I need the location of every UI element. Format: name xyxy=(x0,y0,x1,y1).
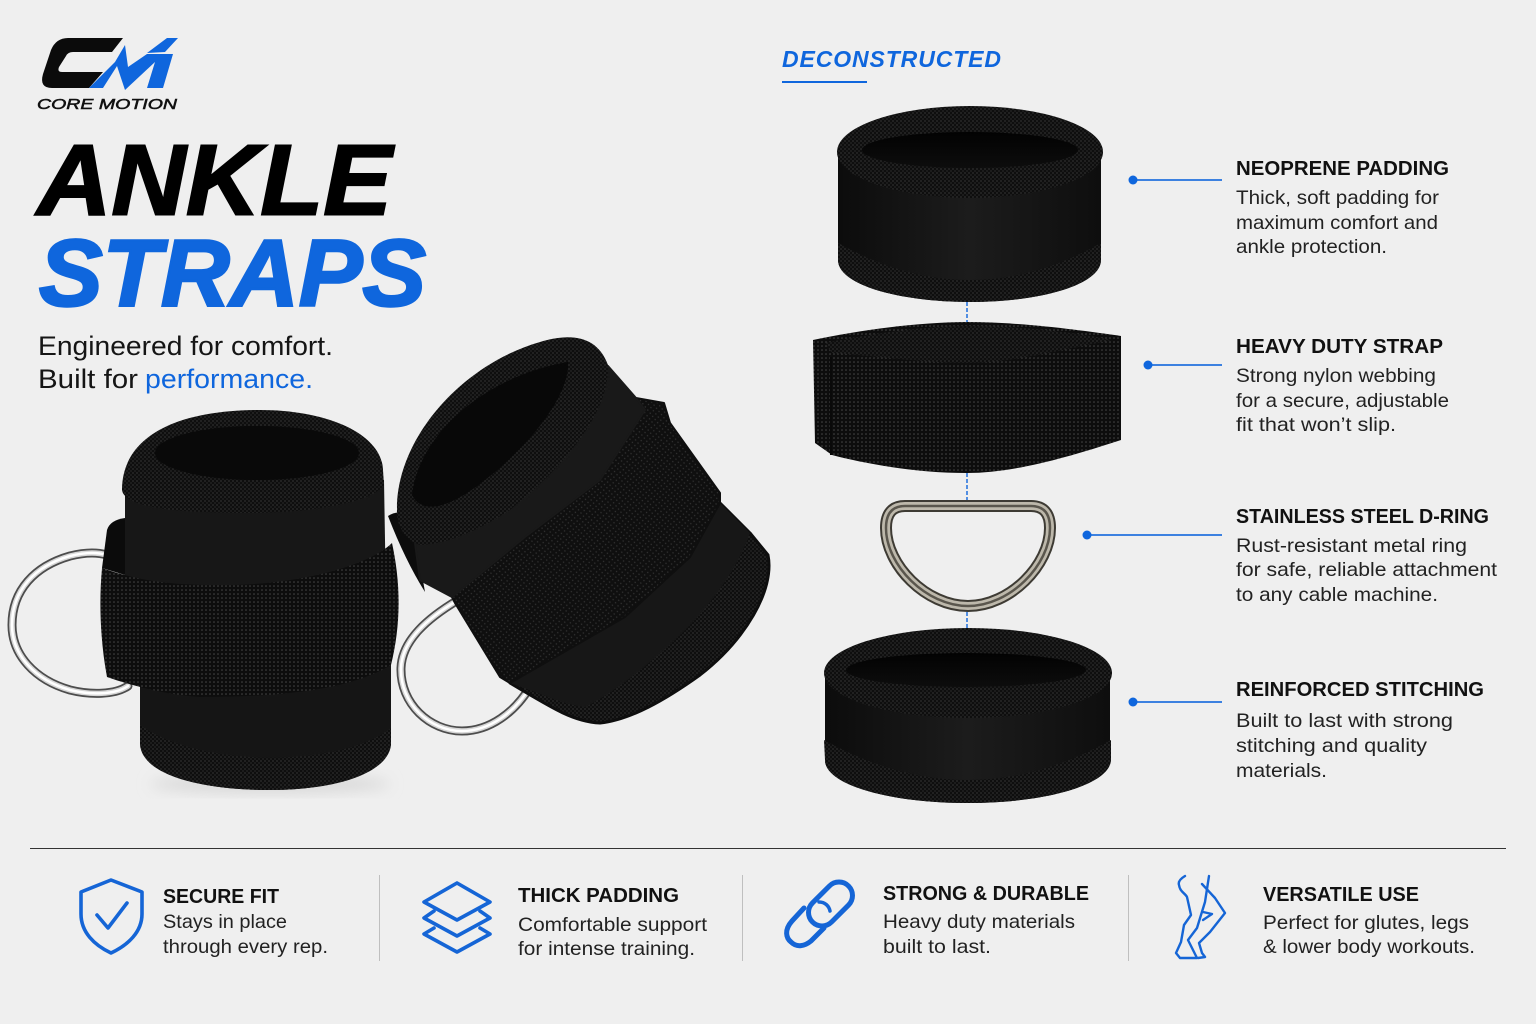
bottom mesh band xyxy=(140,725,391,790)
callout: heavy duty strap xyxy=(1236,336,1449,436)
feature: thick padding: THICK PADDING xyxy=(518,885,679,907)
leader: stitching xyxy=(1128,698,1222,706)
footer rule and dividers xyxy=(30,848,1506,961)
callout: neoprene padding: Thick, soft padding for xyxy=(1236,187,1440,209)
callout: reinforced stitching xyxy=(1236,679,1484,782)
part: reinforced stitching xyxy=(824,628,1112,803)
upper neoprene body xyxy=(125,480,386,600)
webbing band xyxy=(100,543,399,697)
feature: strong and durable: Heavy duty materials xyxy=(883,911,1075,933)
upper neoprene band xyxy=(415,366,645,597)
feature: secure fit: SECURE FIT xyxy=(163,886,279,908)
feature: versatile use: & lower body workouts. xyxy=(1263,936,1475,958)
callout: neoprene padding xyxy=(1236,158,1449,258)
assembly guide lines xyxy=(966,302,968,630)
callout: heavy duty strap: for a secure, adjustable xyxy=(1236,390,1449,412)
leader: neoprene xyxy=(1128,176,1222,184)
feature: thick padding: Comfortable support xyxy=(518,914,708,936)
strap overlap edge xyxy=(830,357,832,455)
feature: secure fit: Stays in place xyxy=(163,911,287,933)
section heading: deconstructed: DECONSTRUCTED xyxy=(782,46,1001,72)
left D-ring xyxy=(12,553,128,693)
title line: straps: STRAPS xyxy=(39,220,426,326)
callout: heavy duty strap: HEAVY DUTY STRAP xyxy=(1236,336,1443,358)
callout: heavy duty strap: Strong nylon webbing xyxy=(1236,365,1436,387)
callout: reinforced stitching: REINFORCED STITCHING xyxy=(1236,679,1484,701)
callout: reinforced stitching: Built to last with strong xyxy=(1236,710,1453,732)
callout: stainless steel D-ring: for safe, reliable attachment xyxy=(1236,559,1498,581)
icon: stacked layers xyxy=(424,883,490,952)
rim xyxy=(397,337,608,545)
strap inner back xyxy=(825,326,1112,363)
callout: stainless steel D-ring xyxy=(1236,506,1498,606)
tagline: Engineered for comfort. xyxy=(38,331,333,361)
feature: thick padding: for intense training. xyxy=(518,938,695,960)
webbing band xyxy=(452,398,720,683)
leader lines xyxy=(1082,176,1222,706)
rim xyxy=(122,410,384,513)
right strap tab xyxy=(388,512,425,592)
feature: thick padding xyxy=(424,883,708,960)
callout: heavy duty strap: fit that won’t slip. xyxy=(1236,414,1396,436)
product photo: assembled ankle straps xyxy=(12,337,769,793)
feature: strong and durable: built to last. xyxy=(883,936,991,958)
lower mesh band xyxy=(510,503,769,723)
feature: strong and durable xyxy=(787,876,1089,958)
callout: neoprene padding: maximum comfort and xyxy=(1236,212,1438,234)
right strap xyxy=(388,337,769,723)
feature: versatile use: Perfect for glutes, legs xyxy=(1263,912,1469,934)
lower neoprene body xyxy=(140,640,391,790)
leader: strap xyxy=(1144,360,1222,370)
tagline: performance. xyxy=(145,364,313,394)
left strap xyxy=(100,410,399,790)
inner opening xyxy=(155,426,359,480)
title line: ankle: ANKLE xyxy=(34,124,395,236)
callout: stainless steel D-ring: Rust-resistant metal ring xyxy=(1236,535,1467,557)
logo wordmark: CORE MOTION xyxy=(37,97,178,113)
bottom band xyxy=(824,740,1111,803)
right D-ring xyxy=(401,600,530,731)
rim xyxy=(824,628,1112,718)
callout: stainless steel D-ring: STAINLESS STEEL D-RING xyxy=(1236,506,1489,528)
title xyxy=(34,124,426,326)
ring tab xyxy=(102,518,125,575)
feature: secure fit xyxy=(81,880,328,958)
feature: secure fit: through every rep. xyxy=(163,936,328,958)
rim xyxy=(837,106,1103,198)
logo mark: M letter xyxy=(89,38,178,90)
callout: reinforced stitching: materials. xyxy=(1236,760,1327,782)
part: heavy duty strap xyxy=(813,322,1121,473)
logo: Core Motion xyxy=(37,38,178,113)
feature: versatile use xyxy=(1176,876,1475,958)
feature: versatile use: VERSATILE USE xyxy=(1263,884,1419,906)
feature: strong and durable: STRONG & DURABLE xyxy=(883,883,1089,905)
icon: legs xyxy=(1176,876,1225,958)
part: neoprene padding xyxy=(837,106,1103,302)
part: stainless steel D-ring xyxy=(886,506,1050,606)
lower neoprene band xyxy=(510,503,750,707)
callout: reinforced stitching: stitching and quality xyxy=(1236,735,1427,757)
icon: chain link xyxy=(787,876,858,946)
leader: D-ring xyxy=(1082,530,1222,540)
callout: stainless steel D-ring: to any cable machine. xyxy=(1236,584,1438,606)
inner opening xyxy=(412,362,568,507)
opening xyxy=(862,132,1078,168)
tagline: Built for xyxy=(38,364,138,394)
callout: neoprene padding: NEOPRENE PADDING xyxy=(1236,158,1449,180)
tagline xyxy=(38,331,333,394)
logo mark: C letter xyxy=(42,38,123,88)
opening xyxy=(846,653,1086,687)
callout: neoprene padding: ankle protection. xyxy=(1236,236,1387,258)
icon: shield with check xyxy=(81,880,142,953)
bottom band xyxy=(838,243,1101,302)
shadow under straps xyxy=(150,775,390,793)
